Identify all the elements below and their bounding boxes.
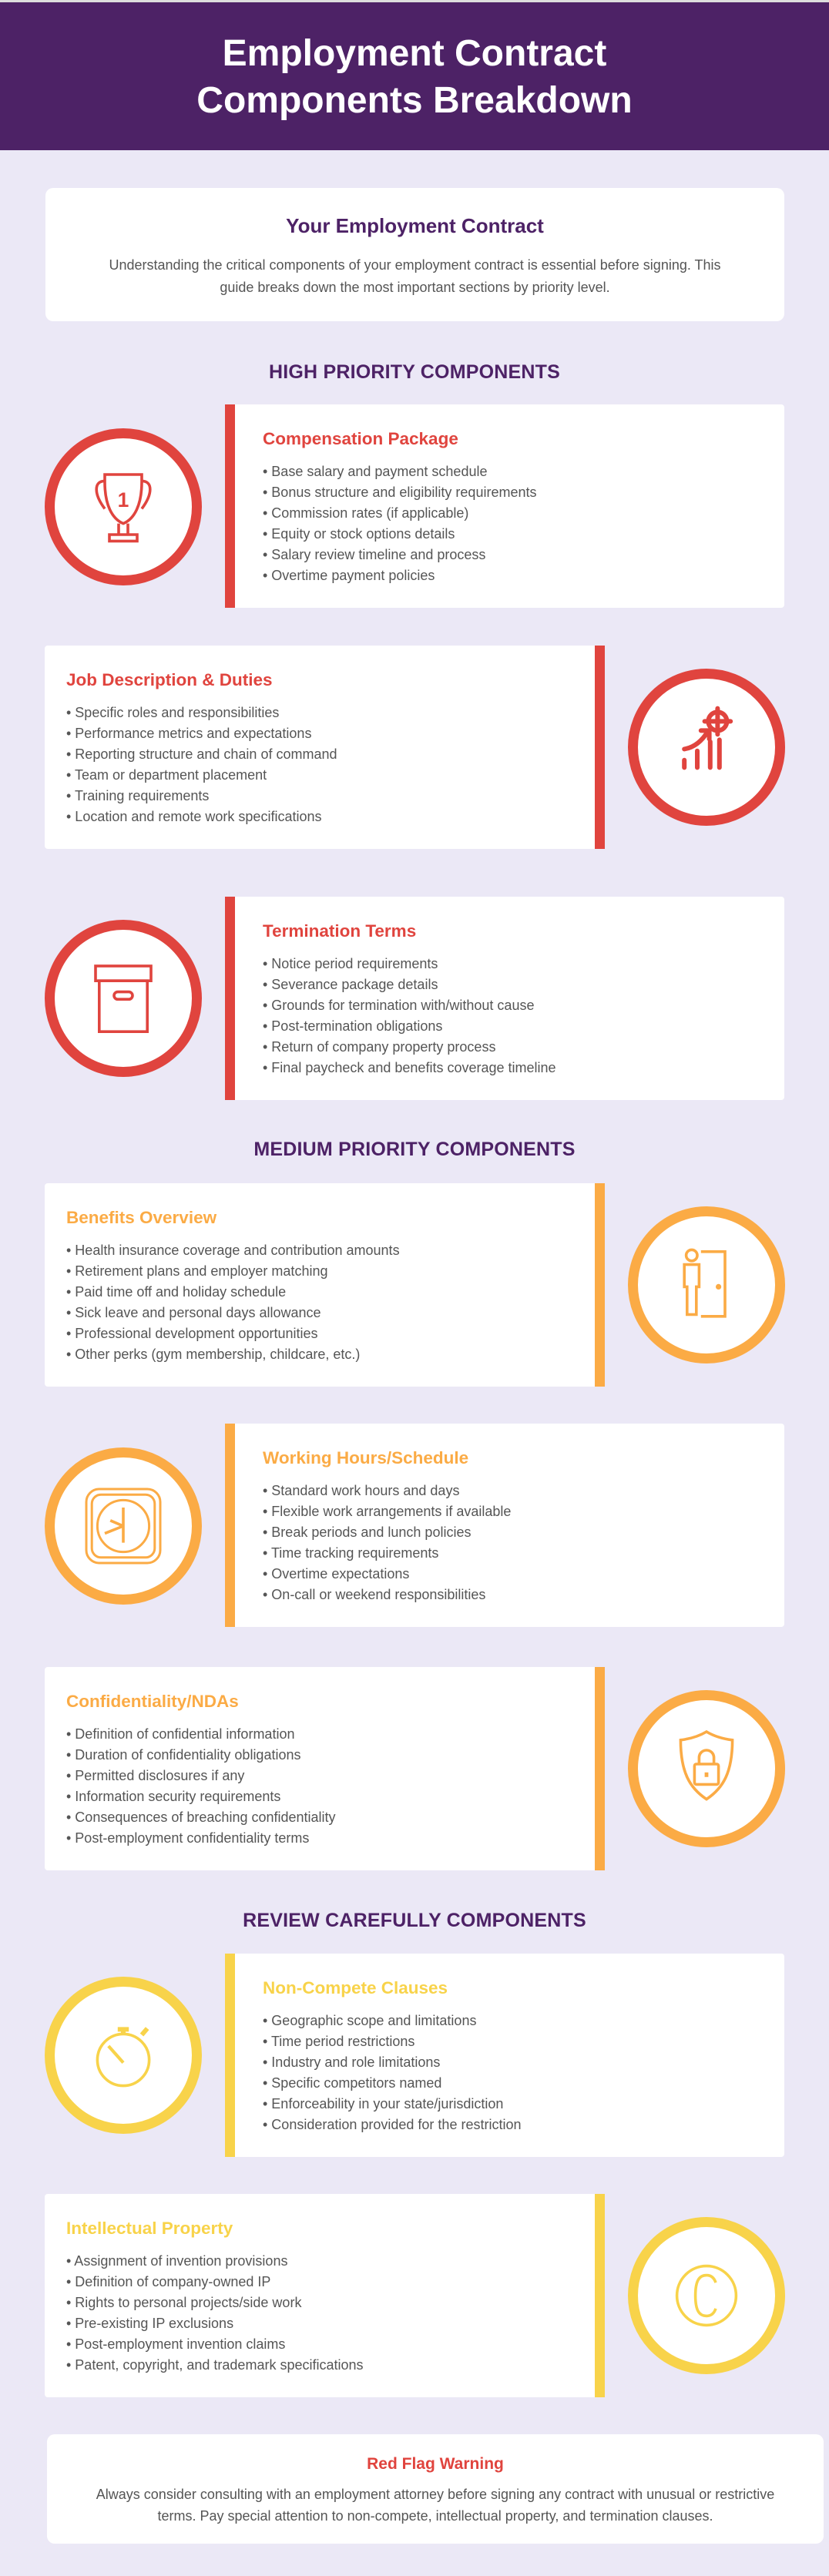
card: working hours: • On-call or weekend responsibilities — [263, 1587, 485, 1602]
card: confidentiality: • Post-employment confidentiality terms — [66, 1830, 309, 1846]
card: working hours: Working Hours/Schedule — [263, 1448, 468, 1467]
card: non-compete: Non-Compete Clauses — [263, 1978, 448, 1997]
card: termination: • Final paycheck and benefits coverage timeline — [263, 1060, 556, 1075]
card: intellectual property: • Assignment of invention provisions — [66, 2253, 287, 2269]
card: confidentiality: • Consequences of breaching confidentiality — [66, 1810, 336, 1825]
card: non-compete: • Specific competitors named — [263, 2075, 441, 2091]
card: termination: • Post-termination obligations — [263, 1018, 442, 1034]
card: job description: • Team or department placement — [66, 767, 267, 783]
card: confidentiality: • Permitted disclosures if any — [66, 1768, 244, 1783]
card: compensation: • Equity or stock options details — [263, 526, 455, 542]
icon: stopwatch — [45, 1977, 202, 2134]
icon: box — [45, 920, 202, 1077]
card: non-compete: • Consideration provided for the restriction — [263, 2117, 521, 2132]
card: benefits: • Other perks (gym membership, childcare, etc.) — [66, 1347, 360, 1362]
header: Employment Contract — [223, 33, 606, 74]
card: benefits: • Paid time off and holiday schedule — [66, 1284, 286, 1300]
card: intellectual property: Intellectual Property — [66, 2219, 233, 2238]
card: non-compete: • Industry and role limitations — [263, 2054, 440, 2070]
top strip — [0, 0, 829, 2]
header: Components Breakdown — [196, 80, 633, 121]
callout title: Red Flag Warning — [367, 2455, 504, 2473]
card: confidentiality: • Definition of confidential information — [66, 1726, 294, 1742]
card: compensation: • Base salary and payment schedule — [263, 464, 487, 479]
card: benefits: Benefits Overview — [66, 1208, 216, 1227]
intro text: Understanding the critical components of your employment contract is essential before signing. This — [109, 257, 721, 273]
callout: red flag warning — [47, 2434, 824, 2544]
card: intellectual property — [45, 2194, 605, 2397]
card: compensation: • Commission rates (if applicable) — [263, 505, 468, 521]
card: non-compete: • Enforceability in your state/jurisdiction — [263, 2096, 503, 2111]
card: job description: • Training requirements — [66, 788, 209, 803]
card: compensation: • Overtime payment policies — [263, 568, 435, 583]
icon: clock — [45, 1447, 202, 1605]
card: termination: Termination Terms — [263, 921, 416, 941]
card: working hours: • Standard work hours and days — [263, 1483, 459, 1498]
card: benefits: • Health insurance coverage and contribution amounts — [66, 1243, 400, 1258]
card: job description — [45, 646, 605, 849]
card: intellectual property: • Post-employment invention claims — [66, 2336, 285, 2352]
heading: medium priority: MEDIUM PRIORITY COMPONENTS — [253, 1139, 576, 1160]
icon: trophy — [45, 428, 202, 585]
card: compensation: • Bonus structure and eligibility requirements — [263, 485, 536, 500]
header — [0, 2, 829, 150]
heading: review carefully: REVIEW CAREFULLY COMPONENTS — [243, 1910, 586, 1931]
intro card — [45, 188, 784, 321]
card: intellectual property: • Rights to personal projects/side work — [66, 2295, 301, 2310]
card: compensation: Compensation Package — [263, 429, 458, 448]
card: compensation — [225, 404, 784, 608]
card: intellectual property: • Patent, copyright, and trademark specifications — [66, 2357, 364, 2373]
card: termination: • Grounds for termination with/without cause — [263, 998, 534, 1013]
card: benefits: • Professional development opportunities — [66, 1326, 317, 1341]
card: job description: • Location and remote work specifications — [66, 809, 321, 824]
icon: trophy: 1 — [118, 488, 129, 512]
card: benefits: • Retirement plans and employer matching — [66, 1263, 327, 1279]
callout text: Always consider consulting with an employment attorney before signing any contract with unusual or restrictive terms. Pay special attention to non-compete, intellectual property, and termination clauses. — [96, 2487, 774, 2524]
card: intellectual property: • Definition of company-owned IP — [66, 2274, 270, 2289]
card: confidentiality: • Duration of confidentiality obligations — [66, 1747, 300, 1763]
icon: growth target — [628, 669, 785, 826]
card: termination: • Severance package details — [263, 977, 438, 992]
card: working hours: • Flexible work arrangements if available — [263, 1504, 511, 1519]
card: termination: • Return of company property process — [263, 1039, 495, 1055]
card: termination: • Notice period requirements — [263, 956, 438, 971]
intro title: Your Employment Contract — [286, 214, 544, 237]
card: job description: Job Description & Duties — [66, 670, 273, 689]
card: job description: • Reporting structure and chain of command — [66, 746, 337, 762]
card: intellectual property: • Pre-existing IP exclusions — [66, 2316, 233, 2331]
card: job description: • Performance metrics and expectations — [66, 726, 311, 741]
heading: high priority: HIGH PRIORITY COMPONENTS — [269, 361, 560, 383]
card: working hours: • Break periods and lunch policies — [263, 1524, 471, 1540]
icon: person door — [628, 1206, 785, 1363]
intro text — [109, 257, 721, 295]
intro text: guide breaks down the most important sections by priority level. — [220, 280, 610, 295]
card: benefits — [45, 1183, 605, 1387]
card: working hours: • Time tracking requirements — [263, 1545, 438, 1561]
card: job description: • Specific roles and responsibilities — [66, 705, 279, 720]
card: benefits: • Sick leave and personal days allowance — [66, 1305, 321, 1320]
icon: copyright — [628, 2217, 785, 2374]
card: confidentiality: Confidentiality/NDAs — [66, 1692, 239, 1711]
card: confidentiality: • Information security requirements — [66, 1789, 280, 1804]
card: non-compete — [225, 1954, 784, 2157]
card: non-compete: • Time period restrictions — [263, 2034, 414, 2049]
icon: shield lock — [628, 1690, 785, 1847]
card: compensation: • Salary review timeline and process — [263, 547, 485, 562]
card: working hours: • Overtime expectations — [263, 1566, 409, 1581]
card: confidentiality — [45, 1667, 605, 1870]
card: working hours — [225, 1424, 784, 1627]
card: non-compete: • Geographic scope and limitations — [263, 2013, 476, 2028]
card: termination — [225, 897, 784, 1100]
